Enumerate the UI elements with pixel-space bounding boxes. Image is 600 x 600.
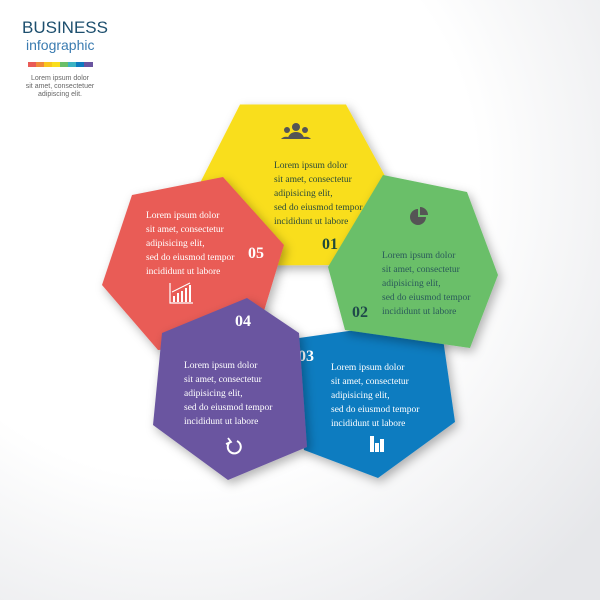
number 02: 02 — [352, 304, 368, 321]
text 03: adipisicing elit, — [331, 391, 390, 401]
text 04: sed do eiusmod tempor — [184, 403, 273, 413]
text 04: adipisicing elit, — [184, 389, 243, 399]
text 02: incididunt ut labore — [382, 307, 456, 317]
text 02: Lorem ipsum dolor — [382, 251, 456, 261]
text 05: Lorem ipsum dolor — [146, 211, 220, 221]
text 02: sit amet, consectetur — [382, 265, 461, 275]
text 05: sit amet, consectetur — [146, 225, 225, 235]
number 05: 05 — [248, 245, 264, 262]
icon: people — [281, 123, 311, 139]
number 01: 01 — [322, 236, 338, 253]
text 05: sed do eiusmod tempor — [146, 253, 235, 263]
text 02: sed do eiusmod tempor — [382, 293, 471, 303]
icon: growth chart — [170, 283, 193, 303]
panel: 03 blue — [285, 318, 455, 478]
icon: refresh — [226, 438, 241, 453]
panel: 04 purple — [153, 298, 307, 480]
text 02: adipisicing elit, — [382, 279, 441, 289]
text 03: sit amet, consectetur — [331, 377, 410, 387]
text 03: sed do eiusmod tempor — [331, 405, 420, 415]
number 04: 04 — [235, 313, 251, 330]
header text: sit amet, consectetuer — [26, 83, 95, 90]
text 03: Lorem ipsum dolor — [331, 363, 405, 373]
text 04: incididunt ut labore — [184, 417, 258, 427]
text 04: Lorem ipsum dolor — [184, 361, 258, 371]
text 05: incididunt ut labore — [146, 267, 220, 277]
number 03: 03 — [298, 348, 314, 365]
rainbow bar — [28, 62, 93, 67]
panel: 05 red — [102, 177, 284, 350]
title: BUSINESS — [22, 18, 108, 37]
text 04: sit amet, consectetur — [184, 375, 263, 385]
text 01: sed do eiusmod tempor — [274, 203, 363, 213]
header text: adipiscing elit. — [38, 91, 82, 98]
icon: pie chart — [410, 207, 428, 225]
panel: 02 green — [328, 175, 498, 348]
panel: 01 yellow — [199, 104, 390, 266]
icon: bar chart — [370, 436, 384, 452]
text 05: adipisicing elit, — [146, 239, 205, 249]
text 01: Lorem ipsum dolor — [274, 161, 348, 171]
header text: Lorem ipsum dolor — [31, 75, 90, 82]
subtitle: infographic — [26, 37, 94, 53]
text 01: sit amet, consectetur — [274, 175, 353, 185]
text 01: adipisicing elit, — [274, 189, 333, 199]
text 03: incididunt ut labore — [331, 419, 405, 429]
text 01: incididunt ut labore — [274, 217, 348, 227]
header — [22, 18, 108, 98]
